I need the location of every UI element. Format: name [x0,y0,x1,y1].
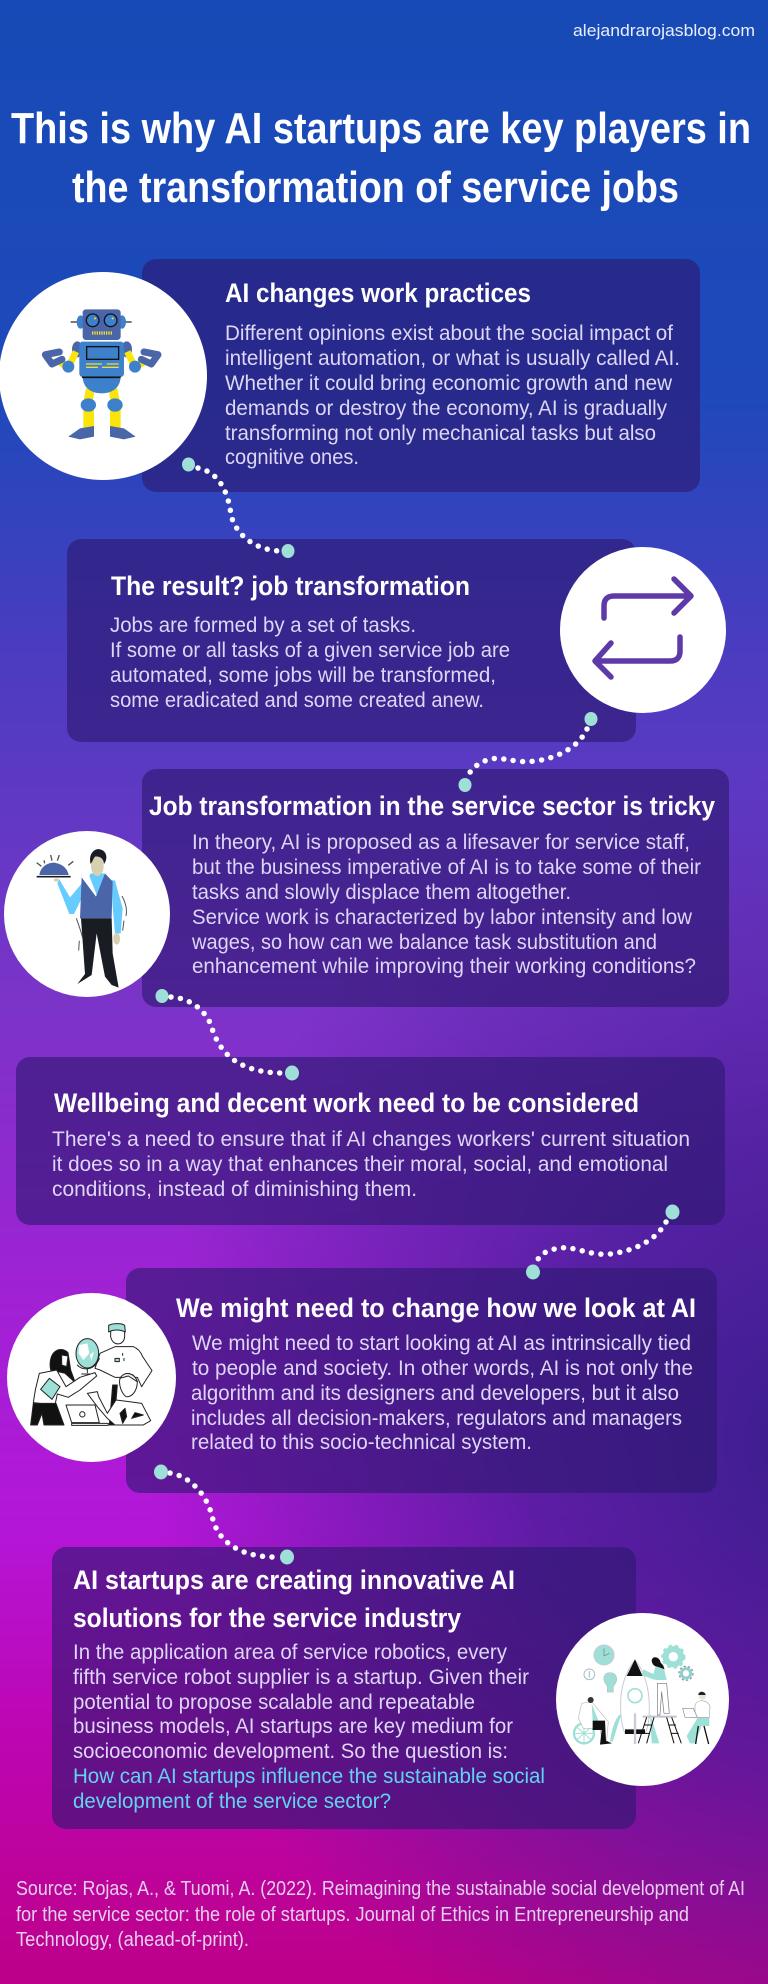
website credit: alejandrarojasblog.com [573,21,755,40]
body text: it does so in a way that enhances their moral, social, and emotional [52,1152,668,1176]
heading: Wellbeing and decent work need to be considered [54,1088,639,1118]
body text: but the business imperative of AI is to take some of their [192,855,701,879]
body text: fifth service robot supplier is a startup. Given their [73,1665,529,1689]
heading: Job transformation in the service sector is tricky [149,791,715,821]
heading: AI changes work practices [225,278,531,308]
body text: socioeconomic development. So the question is: [73,1739,508,1763]
connector: dotted arrow 2 [458,712,598,792]
body text: demands or destroy the economy, AI is gradually [225,396,667,420]
body text: We might need to start looking at AI as intrinsically tied [192,1331,691,1355]
body text: wages, so how can we balance task substitution and [191,930,657,954]
heading: solutions for the service industry [73,1603,461,1633]
body text: In the application area of service robotics, every [73,1640,507,1664]
body text [110,613,510,712]
body text: related to this socio-technical system. [191,1430,532,1454]
connector: dotted arrow 1 [182,458,294,558]
icon: robot [0,272,207,480]
connector: dotted arrow 4 [526,1204,680,1280]
heading [73,1565,515,1633]
heading: AI startups are creating innovative AI [73,1565,515,1595]
body text: Different opinions exist about the social impact of [225,321,673,345]
connector: dotted arrow 3 [156,989,299,1080]
panel: Job transformation in the service sector [4,769,729,1007]
body text: business models, AI startups are key medium for [73,1714,513,1738]
body text: intelligent automation, or what is usually called AI. [225,346,680,370]
body text: Whether it could bring economic growth and new [225,371,672,395]
body text: If some or all tasks of a given service job are [110,638,510,662]
body text [191,1331,693,1454]
panel: The result? job transformation [67,539,726,742]
body text: potential to propose scalable and repeatable [73,1690,475,1714]
title [11,104,751,212]
icon: waiter [4,831,170,997]
body text [73,1640,545,1813]
body text: In theory, AI is proposed as a lifesaver for service staff, [192,830,690,854]
title: the transformation of service jobs [72,163,679,212]
body text: How can AI startups influence the sustainable social [73,1764,545,1788]
body text: conditions, instead of diminishing them. [52,1177,417,1201]
body text: algorithm and its designers and developers, but it also [191,1381,679,1405]
panel: AI changes work practices [0,259,700,492]
body text: development of the service sector? [73,1789,391,1813]
body text: transforming not only mechanical tasks but also [225,421,656,445]
body text: There's a need to ensure that if AI changes workers' current situation [52,1127,690,1151]
panel: Wellbeing and decent work [16,1057,725,1225]
body text: Jobs are formed by a set of tasks. [110,613,416,637]
icon: startup team with rocket [556,1613,729,1786]
body text: tasks and slowly displace them altogether. [192,880,571,904]
icon: team with globe [7,1293,176,1462]
body text: cognitive ones. [225,445,359,469]
source citation: Technology, (ahead-of-print). [16,1928,249,1951]
heading: The result? job transformation [111,571,470,601]
body text: some eradicated and some created anew. [110,688,484,712]
panel: change how we look at AI [7,1268,717,1493]
heading: We might need to change how we look at AI [176,1293,696,1323]
body text [52,1127,690,1201]
icon: transformation arrows [560,547,726,713]
body text: enhancement while improving their working conditions? [192,954,696,978]
body text: automated, some jobs will be transformed, [110,663,496,687]
panel: AI startups are creating innovative AI solutions [52,1547,729,1829]
body text: includes all decision-makers, regulators and managers [191,1406,682,1430]
source citation: for the service sector: the role of startups. Journal of Ethics in Entrepreneurship and [16,1903,689,1926]
body text [225,321,680,469]
source citation [16,1877,745,1951]
body text: Service work is characterized by labor intensity and low [192,905,692,929]
connector: dotted arrow 5 [154,1464,294,1564]
body text [191,830,701,978]
body text: to people and society. In other words, AI is not only the [192,1356,693,1380]
